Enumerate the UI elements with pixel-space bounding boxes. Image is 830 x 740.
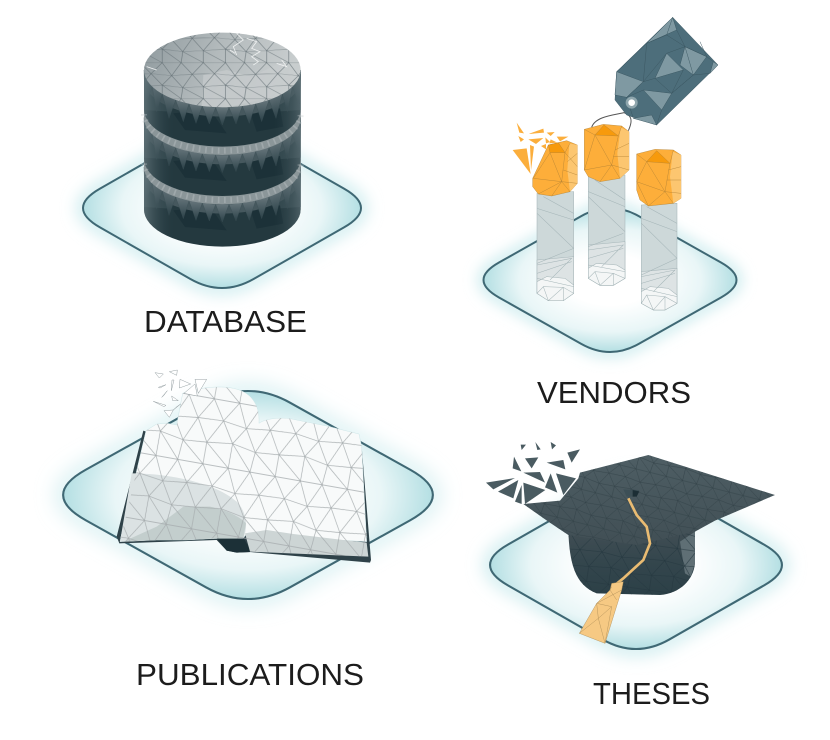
- label: database: DATABASE: [144, 304, 307, 339]
- panel: database: [83, 33, 361, 339]
- platform: publications: [63, 391, 433, 599]
- cap button: [623, 489, 639, 497]
- orange shards: [513, 123, 568, 174]
- platform: vendors: [484, 208, 736, 352]
- book pages: [120, 387, 367, 542]
- icon: vendor columns and tag: [513, 17, 718, 310]
- tassel: [579, 498, 650, 643]
- column 2: [588, 175, 625, 285]
- cord: [592, 113, 631, 131]
- cap mesh: [523, 455, 775, 545]
- platform: database: [83, 128, 361, 288]
- label: publications: PUBLICATIONS: [136, 657, 364, 692]
- icon: open book: [117, 370, 371, 563]
- icon: database cylinder: [144, 33, 301, 247]
- platform: theses: [490, 481, 782, 649]
- label: theses: THESES: [593, 676, 710, 711]
- panel: theses: [486, 442, 782, 711]
- dark shards: [486, 442, 580, 504]
- orange caps: [533, 124, 681, 206]
- column 3: [641, 203, 677, 310]
- column 1: [537, 192, 574, 301]
- panel: publications: [63, 370, 433, 692]
- panel: vendors: [484, 17, 736, 410]
- book cover: [117, 431, 371, 563]
- price tag: [615, 17, 718, 125]
- cap board: [523, 455, 775, 545]
- icon: graduation cap: [486, 442, 775, 643]
- label: vendors: VENDORS: [537, 375, 691, 410]
- page mesh: [120, 387, 368, 557]
- paper shards: [153, 370, 207, 417]
- cap body: [568, 527, 695, 595]
